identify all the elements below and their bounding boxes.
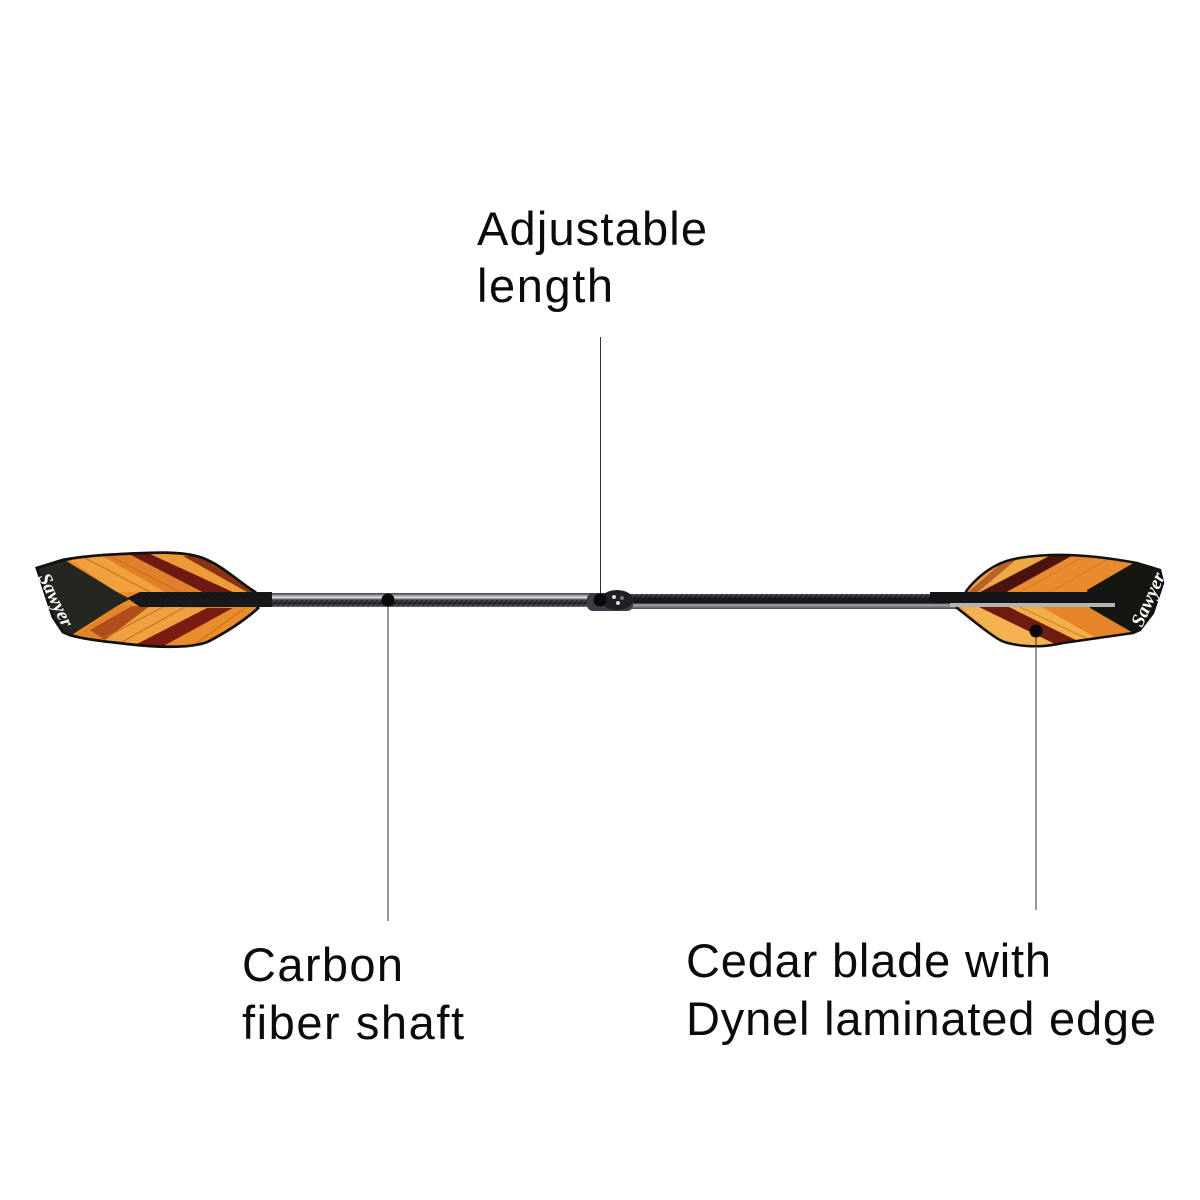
adjustable joint [587, 590, 633, 611]
callout: adjustable length: length [477, 259, 613, 312]
callout: carbon fiber shaft [242, 594, 464, 1049]
paddle illustration [30, 550, 1170, 650]
callout: adjustable length [477, 202, 707, 606]
logo: Sawyer (left): Sawyer [34, 570, 78, 631]
callout: cedar blade: Dynel laminated edge [686, 992, 1156, 1045]
black blade tip [1087, 564, 1162, 632]
callout: carbon fiber shaft: Carbon [242, 938, 403, 991]
callout: carbon fiber shaft: fiber shaft [242, 996, 464, 1049]
black blade tip [38, 561, 129, 634]
left blade [30, 550, 272, 650]
shaft: carbon fiber [250, 593, 965, 609]
callout: cedar blade: Cedar blade with [686, 934, 1051, 987]
logo: Sawyer (right): Sawyer [1127, 569, 1170, 630]
callout: cedar blade [686, 624, 1156, 1045]
callout: adjustable length: Adjustable [477, 202, 707, 255]
right blade [930, 550, 1170, 650]
